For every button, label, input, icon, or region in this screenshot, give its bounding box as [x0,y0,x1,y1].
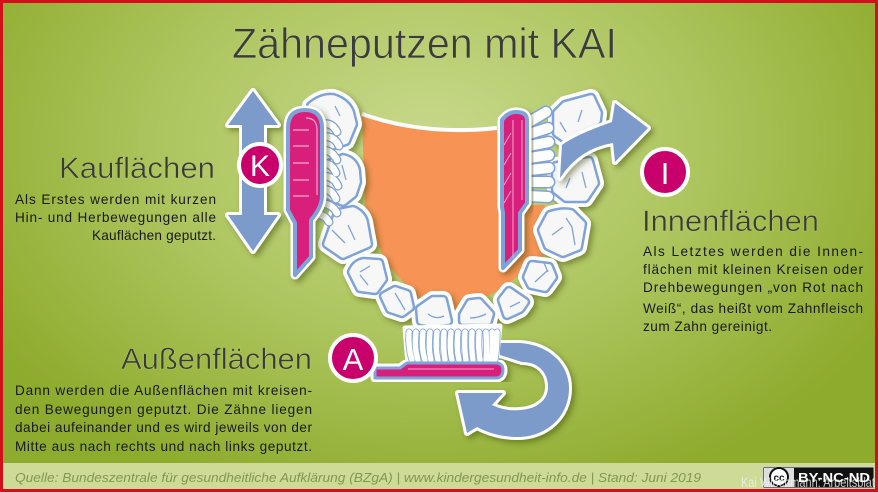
arrow: curved to the right [560,103,648,178]
text: Kauflächen: Hin- und Herbewegungen alle [15,210,216,225]
text: Kauflächen: Kauflächen geputzt. [92,228,216,243]
icon: double arrow up and down [228,91,278,251]
text: Außenflächen: Mitte aus nach rechts und nach links geputzt. [15,439,312,454]
text: Innenflächen: Als Letztes werden die Innen- [643,244,863,259]
text: Außenflächen [15,383,312,454]
licence badge: BY-NC-ND [798,470,870,485]
teeth: dental arch [311,98,598,323]
badge: K: K [250,150,270,183]
source line: Quelle: Bundeszentrale für gesundheitliche Aufklärung (BZgA) | www.kindergesundheit-info.de | Stand: Juni 2019 [15,471,701,485]
palate: orange area [362,114,545,310]
heading: Außenflächen: Außenflächen [121,343,312,376]
text: Innenflächen: flächen mit kleinen Kreisen oder [643,262,863,277]
toothbrush: outer surfaces [375,326,503,378]
text: Außenflächen: den Bewegungen geputzt. Die Zähne liegen [15,402,312,417]
badge: I: I [661,156,669,191]
heading: Innenflächen: Innenflächen [642,205,819,238]
toothbrush: chewing surfaces [288,110,339,275]
badge: I [642,149,688,195]
title: Zähneputzen mit KAI [232,20,617,68]
text: Innenflächen: Weiß“, das heißt vom Zahnfleisch [643,301,863,316]
licence badge [763,467,874,488]
text: Innenflächen: Drehbewegungen „von Rot nach [643,280,863,295]
licence badge: cc [773,473,785,484]
text: Innenflächen [643,244,863,334]
text: Außenflächen: Dann werden die Außenflächen mit kreisen- [15,383,312,398]
text: Außenflächen: dabei aufeinander und es wird jeweils von der [15,420,312,435]
badge: K [239,144,281,186]
heading: Kauflächen: Kauflächen [59,152,215,185]
text: Kauflächen [15,192,216,243]
text: Kauflächen: Als Erstes werden mit kurzen [15,192,216,207]
arrow: circular return [458,343,569,437]
toothbrush: inner surfaces [502,112,549,268]
badge: A: A [343,342,364,377]
badge: A [330,335,376,381]
text: Innenflächen: zum Zahn gereinigt. [643,319,772,334]
footer band [3,463,875,489]
